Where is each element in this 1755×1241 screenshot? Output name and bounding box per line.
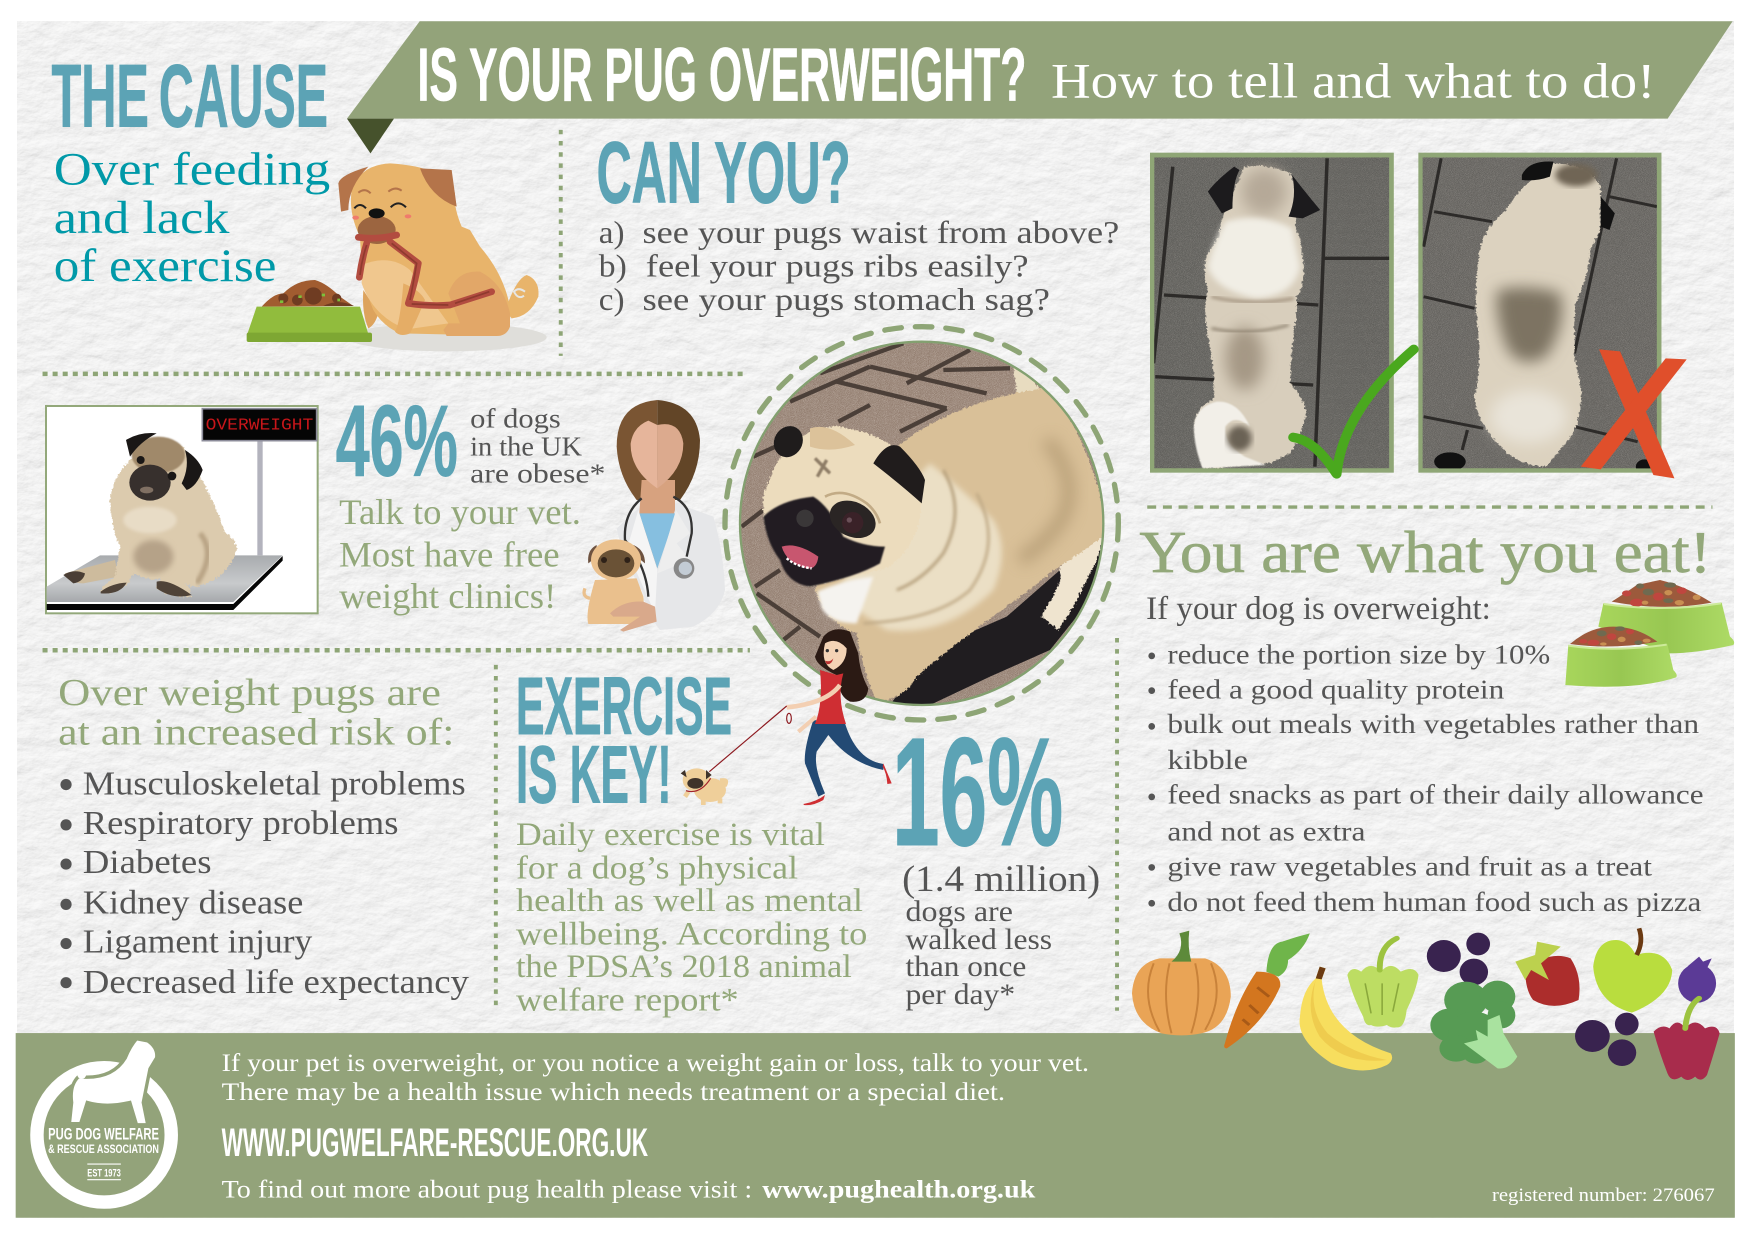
section: you are what you eat: feed snacks as part of their daily allowance	[1167, 780, 1704, 811]
photo: pug on scale: OVERWEIGHT	[206, 416, 313, 435]
section: can you	[597, 124, 1119, 317]
section: you are what you eat: kibble	[1167, 745, 1248, 776]
section: the cause heading: Over feeding	[54, 144, 330, 196]
statistic: 46 percent: are obese*	[470, 458, 606, 489]
statistic: 16 percent	[892, 705, 1100, 1011]
footer band: registered number: 276067	[1492, 1185, 1715, 1206]
icon: woman walking small pug	[681, 629, 892, 805]
text: talk to your vet: Talk to your vet.	[339, 492, 581, 532]
section: health risks: Decreased life expectancy	[83, 964, 469, 1001]
section: health risks	[58, 672, 469, 1001]
section: exercise is key: IS	[516, 730, 557, 821]
icon: red cross	[1581, 349, 1687, 478]
section: health risks: Diabetes	[83, 844, 212, 881]
section: exercise is key: Daily exercise is vital	[516, 817, 825, 853]
icon: aubergine and beet	[1654, 957, 1720, 1080]
section: you are what you eat: reduce the portion size by 10%	[1167, 640, 1550, 671]
footer band: There may be a health issue which needs treatment or a special diet.	[222, 1077, 1005, 1106]
icon: blueberries	[1427, 933, 1639, 1066]
icon: apple	[1593, 928, 1672, 1013]
section: can you: b)	[599, 248, 627, 283]
section: health risks: Musculoskeletal problems	[83, 766, 466, 803]
section: can you: see your pugs stomach sag?	[642, 282, 1050, 317]
section: exercise is key	[516, 661, 867, 1019]
icon: carrot	[1224, 933, 1310, 1048]
section: you are what you eat: You are what you eat!	[1139, 519, 1711, 585]
section: can you: a)	[599, 215, 625, 250]
statistic: 46 percent: of dogs	[470, 404, 561, 435]
photo: large pug in circle	[725, 327, 1118, 720]
section: you are what you eat: and not as extra	[1167, 817, 1366, 848]
section: exercise is key: for a dog’s physical	[516, 851, 798, 887]
icon: banana	[1300, 967, 1392, 1070]
statistic: 16 percent: per day*	[905, 979, 1015, 1011]
text: talk to your vet	[339, 492, 581, 616]
section: the cause heading: CAUSE	[159, 45, 328, 145]
logo: pug dog welfare: PUG DOG WELFARE	[48, 1124, 159, 1143]
section: exercise is key: welfare report*	[516, 983, 739, 1019]
section: you are what you eat: give raw vegetables and fruit as a treat	[1167, 851, 1652, 882]
icon: strawberry	[1515, 942, 1580, 1006]
icon: food bowls	[1565, 580, 1734, 687]
statistic: 16 percent: dogs are	[905, 896, 1013, 928]
section: you are what you eat	[1139, 519, 1711, 918]
title banner: IS YOUR PUG OVERWEIGHT?	[417, 33, 1026, 117]
title banner: How to tell and what to do!	[1051, 53, 1655, 108]
statistic: 46 percent: in the UK	[470, 432, 582, 463]
photo: healthy pug from above	[1150, 153, 1394, 473]
text: talk to your vet: Most have free	[339, 534, 560, 574]
icon: green pepper	[1347, 938, 1418, 1028]
section: you are what you eat: do not feed them human food such as pizza	[1167, 887, 1702, 918]
icon: vet with pug	[584, 400, 725, 632]
text: talk to your vet: weight clinics!	[339, 576, 556, 616]
section: health risks: Kidney disease	[83, 884, 303, 921]
photo: pug on scale	[46, 406, 318, 613]
icon: pumpkin	[1132, 931, 1231, 1035]
footer band	[16, 1033, 1735, 1218]
logo: pug dog welfare: EST 1973	[87, 1167, 121, 1179]
section: the cause heading: of exercise	[54, 240, 276, 292]
section: exercise is key: KEY!	[570, 730, 672, 821]
section: you are what you eat: If your dog is overweight:	[1146, 591, 1491, 627]
section: the cause heading	[51, 45, 330, 292]
statistic: 16 percent: (1.4 million)	[902, 858, 1100, 900]
section: the cause heading: and lack	[54, 192, 230, 244]
section: health risks: Ligament injury	[83, 923, 312, 960]
section: health risks: at an increased risk of:	[58, 711, 454, 753]
section: you are what you eat: bulk out meals with vegetables rather than	[1167, 709, 1699, 740]
icon: cartoon pug eating sausages	[247, 163, 547, 351]
logo: pug dog welfare: & RESCUE ASSOCIATION	[48, 1142, 159, 1156]
section: exercise is key: health as well as mental	[516, 883, 863, 919]
footer band: www.pughealth.org.uk	[762, 1175, 1036, 1204]
section: exercise is key: wellbeing. According to	[516, 917, 867, 953]
section: can you: see your pugs waist from above?	[642, 215, 1119, 250]
icons: fruit and vegetables	[1132, 928, 1720, 1080]
logo: pug dog welfare	[37, 1039, 171, 1202]
section: can you: c)	[599, 282, 625, 317]
icon: broccoli	[1430, 981, 1517, 1069]
title banner	[347, 21, 1733, 153]
statistic: 16 percent: 16%	[892, 705, 1063, 878]
section: you are what you eat: feed a good quality protein	[1167, 674, 1504, 705]
statistic: 16 percent: than once	[905, 951, 1026, 983]
section: can you: YOU?	[714, 124, 851, 222]
section: health risks: Over weight pugs are	[58, 672, 441, 714]
section: health risks: Respiratory problems	[83, 805, 398, 842]
footer band: WWW.PUGWELFARE-RESCUE.ORG.UK	[222, 1120, 648, 1165]
section: can you: feel your pugs ribs easily?	[646, 248, 1029, 283]
statistic: 46 percent: 46%	[336, 386, 458, 498]
section: can you: CAN	[597, 124, 702, 222]
section: exercise is key: the PDSA’s 2018 animal	[516, 949, 852, 985]
section: the cause heading: THE	[51, 45, 149, 145]
footer band: If your pet is overweight, or you notice a weight gain or loss, talk to your vet.	[222, 1048, 1089, 1077]
footer band: To find out more about pug health please visit :	[222, 1175, 752, 1204]
photo: overweight pug from above	[1418, 153, 1661, 474]
icon: green check	[1293, 349, 1414, 474]
section: exercise is key: EXERCISE	[516, 661, 732, 752]
statistic: 16 percent: walked less	[905, 924, 1052, 956]
